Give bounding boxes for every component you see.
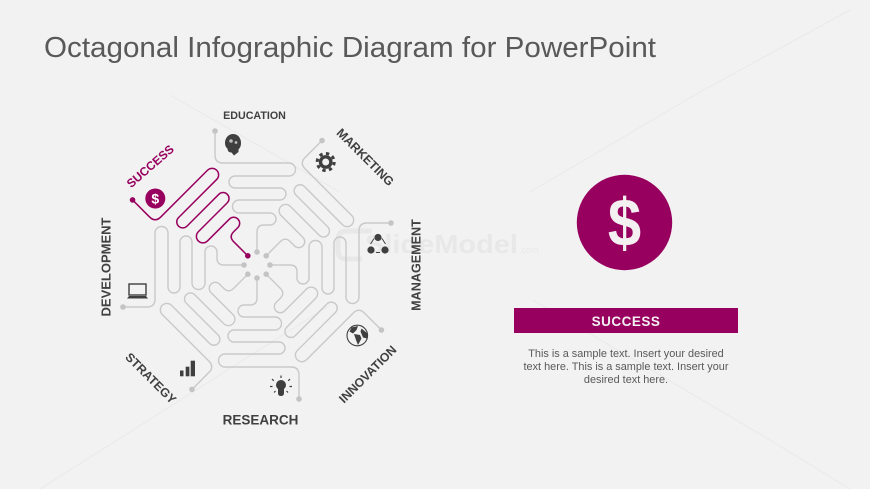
icon: small dollar	[145, 188, 165, 208]
label: marketing: MARKETING	[334, 126, 397, 189]
detail icon: large dollar	[577, 175, 672, 270]
path: strategy	[133, 245, 281, 393]
detail text block: desired text here.	[584, 374, 668, 386]
label: management: MANAGEMENT	[410, 219, 424, 311]
label: research: RESEARCH	[223, 412, 298, 428]
watermark: .com	[519, 245, 539, 255]
path: management	[267, 220, 394, 304]
icon: small dollar: $	[151, 190, 159, 206]
watermark: SlideModel	[365, 229, 518, 259]
detail heading bar: SUCCESS	[592, 314, 660, 329]
label: strategy: STRATEGY	[122, 350, 179, 407]
label: success: SUCCESS	[124, 142, 177, 191]
icon: globe	[347, 325, 368, 346]
path: research	[218, 275, 302, 402]
path: success highlighted	[129, 141, 277, 289]
detail text block: text here. This is a sample text. Insert your	[524, 361, 729, 373]
path: education	[212, 128, 296, 255]
label: development: DEVELOPMENT	[98, 217, 114, 316]
label: education: EDUCATION	[223, 110, 286, 122]
icon: bar chart	[180, 361, 195, 376]
detail icon: large dollar: $	[608, 184, 641, 261]
path: development	[120, 226, 247, 310]
icon: team triad	[367, 234, 389, 254]
detail text block: This is a sample text. Insert your desired	[528, 348, 724, 360]
watermark	[338, 229, 539, 259]
icon: head with gears	[225, 134, 241, 156]
icon: laptop	[127, 284, 148, 298]
icon: gear	[317, 154, 334, 170]
octagonal maze diagram	[120, 128, 394, 402]
detail heading bar	[514, 308, 738, 333]
label: innovation: INNOVATION	[336, 343, 400, 406]
path: innovation	[237, 241, 385, 389]
path: marketing	[233, 137, 381, 285]
title: Octagonal Infographic Diagram for PowerPoint	[44, 32, 656, 64]
detail text block	[524, 348, 729, 386]
icon: light bulb	[270, 376, 292, 396]
